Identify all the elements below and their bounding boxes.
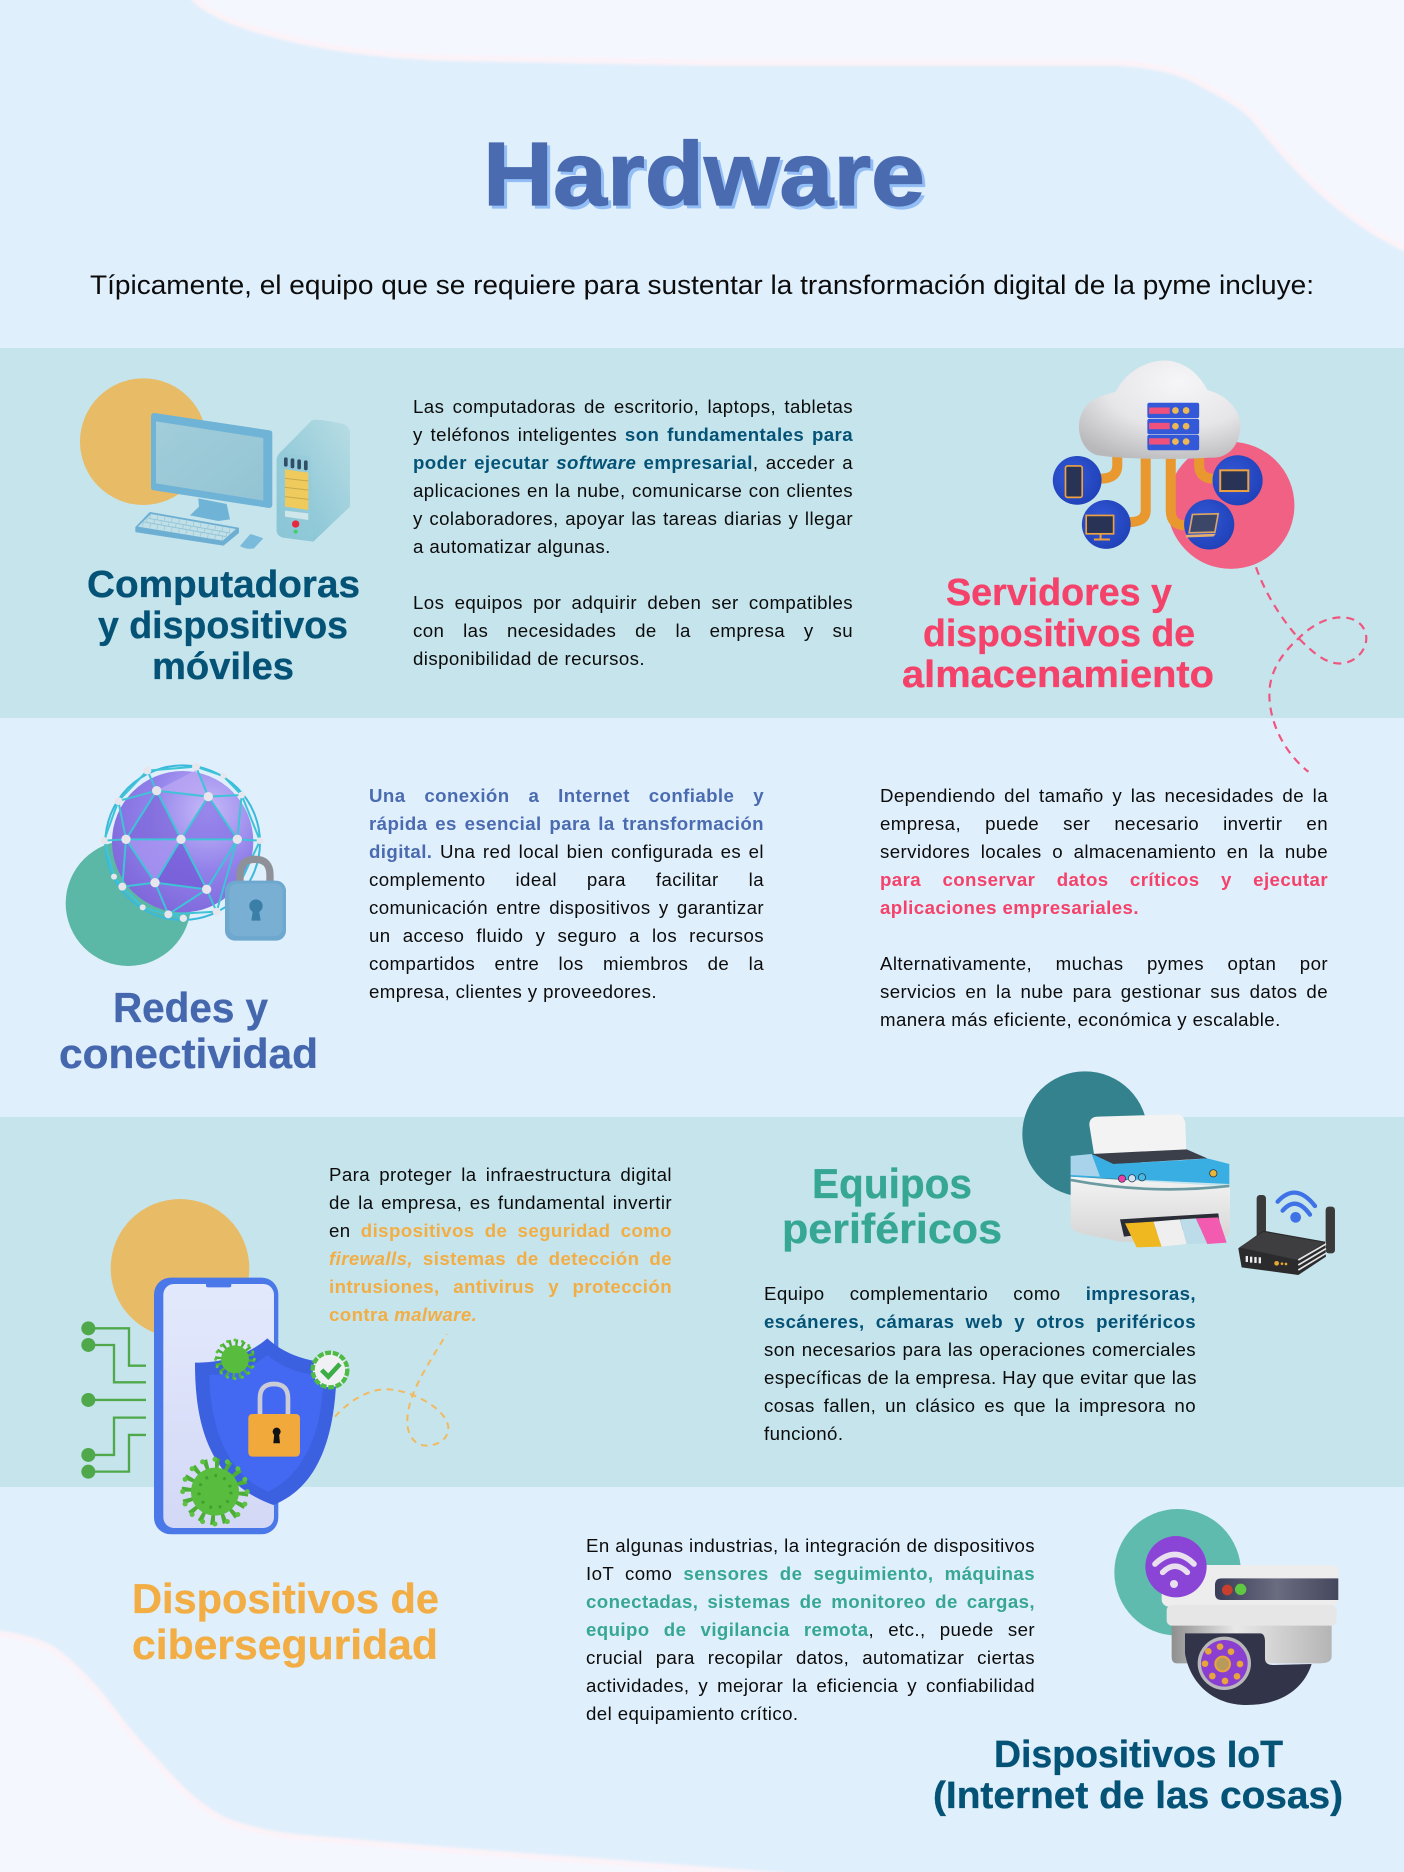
heading: equipos periféricos: periféricos — [782, 1205, 1002, 1252]
heading: computadoras — [87, 564, 360, 688]
heading: dispositivos IoT — [933, 1734, 1343, 1817]
heading: computadoras: Computadoras — [87, 564, 360, 606]
text block: redes: complemento ideal para facilitar la — [369, 868, 764, 890]
text block: servidores: para conservar datos críticos y ejecutar — [880, 868, 1328, 890]
text block: IoT: En algunas industrias, la integración de dispositivos — [586, 1535, 1035, 1556]
icon: IoT camera — [1114, 1509, 1338, 1705]
text block: redes: comunicación entre dispositivos y garantizar — [369, 896, 764, 918]
heading: ciberseguridad — [132, 1575, 439, 1668]
heading: servidores: dispositivos de — [923, 613, 1195, 655]
text block: servidores: manera más eficiente, económica y escalable. — [880, 1008, 1281, 1030]
icon: network sphere — [66, 763, 286, 966]
heading: redes: conectividad — [59, 1030, 318, 1077]
text block: IoT: conectadas, sistemas de monitoreo de cargas, — [586, 1591, 1035, 1612]
text block: servidores: Alternativamente, muchas pymes optan por — [880, 952, 1328, 974]
heading: ciberseguridad: Dispositivos de — [132, 1575, 439, 1622]
text block: ciberseguridad: Para proteger la infraestructura digital — [329, 1164, 672, 1184]
subtitle: Típicamente, el equipo que se requiere para sustentar la transformación digital de la pyme incluye: — [90, 270, 1314, 300]
text block: redes: digital. Una red local bien configurada es el — [369, 840, 764, 862]
text block: IoT — [586, 1535, 1035, 1724]
text block: ciberseguridad: de la empresa, es fundamental invertir — [329, 1192, 672, 1212]
background shape: top right brush — [192, 0, 1404, 250]
text block: computadoras: a automatizar algunas. — [413, 536, 611, 556]
text block: redes: Una conexión a Internet confiable y — [369, 784, 764, 806]
text block: ciberseguridad: contra malware. — [329, 1304, 477, 1324]
heading: dispositivos IoT: Dispositivos IoT — [994, 1734, 1283, 1776]
text block: IoT: del equipamiento crítico. — [586, 1703, 798, 1724]
text block: servidores: servidores locales o almacenamiento en la nube — [880, 840, 1328, 862]
text block: ciberseguridad: en dispositivos de seguridad como — [329, 1220, 672, 1240]
arrow: orange dashed loop — [335, 1334, 448, 1446]
arrow: pink dashed loop — [1256, 567, 1366, 772]
band: seguridad and periféricos — [0, 1117, 1404, 1487]
heading: ciberseguridad: ciberseguridad — [132, 1621, 438, 1668]
band: computadoras and servidores — [0, 348, 1404, 718]
text block: periféricos — [764, 1282, 1197, 1444]
text block: servidores: servicios en la nube para gestionar sus datos de — [880, 980, 1328, 1002]
text block: computadoras: y teléfonos inteligentes son fundamentales para — [413, 424, 853, 444]
text block: ciberseguridad — [329, 1164, 672, 1324]
text block: periféricos: cosas fallen, un clásico es que la impresora no — [764, 1394, 1196, 1416]
heading: dispositivos IoT: (Internet de las cosas) — [933, 1775, 1343, 1817]
text block: computadoras: disponibilidad de recursos. — [413, 648, 645, 668]
text block: redes: compartidos entre los miembros de la — [369, 952, 764, 974]
text block: redes — [369, 784, 764, 1002]
text block: computadoras: Los equipos por adquirir deben ser compatibles — [413, 592, 853, 612]
icon: cloud servers — [1053, 361, 1366, 772]
text block: periféricos: escáneres, cámaras web y otros periféricos — [764, 1310, 1196, 1332]
heading: redes — [59, 984, 318, 1077]
text block: servidores: Dependiendo del tamaño y las necesidades de la — [880, 784, 1328, 806]
heading: equipos periféricos — [782, 1160, 1002, 1252]
text block: IoT: actividades, y mejorar la eficiencia y confiabilidad — [586, 1675, 1035, 1696]
heading: computadoras: y dispositivos — [98, 605, 348, 647]
text block: periféricos: son necesarios para las operaciones comerciales — [764, 1338, 1196, 1360]
heading: servidores — [902, 572, 1214, 696]
heading: redes: Redes y — [113, 984, 269, 1031]
text block: computadoras: Las computadoras de escritorio, laptops, tabletas — [413, 396, 853, 416]
text block: ciberseguridad: firewalls, sistemas de detección de — [329, 1248, 672, 1268]
text block: computadoras: y colaboradores, apoyar las tareas diarias y llegar — [413, 508, 853, 528]
title: Hardware — [483, 125, 925, 225]
text block: servidores: aplicaciones empresariales. — [880, 896, 1139, 918]
heading: servidores: Servidores y — [946, 572, 1172, 614]
heading: servidores: almacenamiento — [902, 654, 1214, 696]
text block: redes: rápida es esencial para la transformación — [369, 812, 764, 834]
text block: periféricos: Equipo complementario como impresoras, — [764, 1282, 1196, 1304]
icon: printer and router — [1022, 1071, 1335, 1275]
text block: IoT: IoT como sensores de seguimiento, máquinas — [586, 1563, 1035, 1584]
icon: computer — [80, 378, 350, 549]
text block: ciberseguridad: intrusiones, antivirus y protección — [329, 1276, 672, 1296]
text block: periféricos: específicas de la empresa. Hay que evitar que las — [764, 1366, 1197, 1388]
heading: computadoras: móviles — [152, 646, 294, 688]
text block: computadoras — [413, 396, 853, 669]
text block: servidores — [880, 784, 1328, 1030]
text block: redes: empresa, clientes y proveedores. — [369, 980, 657, 1002]
heading: equipos periféricos: Equipos — [812, 1160, 972, 1207]
text block: servidores: empresa, puede ser necesario invertir en — [880, 812, 1328, 834]
text block: computadoras: poder ejecutar software empresarial, acceder a — [413, 452, 853, 472]
icon: phone security — [81, 1199, 448, 1534]
text block: IoT: crucial para recopilar datos, automatizar ciertas — [586, 1647, 1035, 1668]
background shape: bottom left brush — [0, 1633, 788, 1872]
text block: periféricos: funcionó. — [764, 1422, 843, 1444]
text block: redes: un acceso fluido y seguro a los recursos — [369, 924, 764, 946]
text block: computadoras: con las necesidades de la empresa y su — [413, 620, 853, 640]
text block: IoT: equipo de vigilancia remota, etc., puede ser — [586, 1619, 1035, 1640]
text block: computadoras: aplicaciones en la nube, comunicarse con clientes — [413, 480, 853, 500]
